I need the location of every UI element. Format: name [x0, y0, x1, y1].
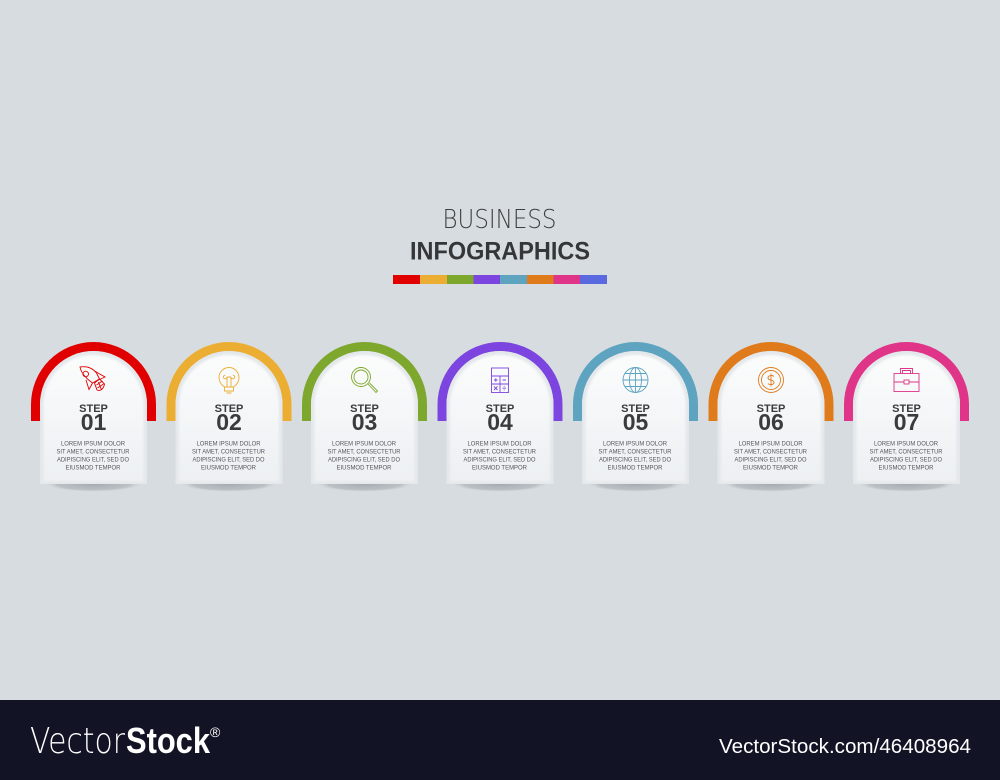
- body text: SIT AMET, CONSECTETUR: [56, 449, 130, 456]
- body text: EIUSMOD TEMPOR: [472, 465, 527, 472]
- card shadow: [858, 476, 956, 492]
- step label: STEP: [350, 403, 379, 415]
- icon: magnifying glass: [352, 368, 378, 392]
- body text: ADIPISCING ELIT, SED DO: [192, 457, 265, 464]
- arch: red: [31, 342, 156, 421]
- body text: ADIPISCING ELIT, SED DO: [870, 457, 942, 464]
- body text: [56, 441, 130, 472]
- body text: [598, 441, 672, 472]
- body text: [734, 441, 807, 472]
- body text: ADIPISCING ELIT, SED DO: [464, 457, 536, 464]
- icon: rocket: [80, 367, 105, 390]
- footer logo: Vector: [30, 721, 125, 762]
- body text: EIUSMOD TEMPOR: [743, 465, 798, 472]
- body text: [870, 441, 943, 472]
- card: [40, 351, 147, 484]
- step 06: [708, 342, 834, 492]
- body text: [328, 441, 401, 472]
- body text: EIUSMOD TEMPOR: [878, 465, 934, 472]
- body text: SIT AMET, CONSECTETUR: [870, 449, 943, 456]
- card: [582, 351, 689, 484]
- step number: 01: [81, 409, 106, 435]
- step 07: [844, 342, 969, 492]
- icon: globe: [623, 368, 648, 392]
- step label: STEP: [757, 403, 785, 415]
- colour bar: [393, 275, 607, 284]
- body text: SIT AMET, CONSECTETUR: [734, 449, 807, 456]
- body text: ADIPISCING ELIT, SED DO: [734, 457, 807, 464]
- body text: LOREM IPSUM DOLOR: [196, 441, 261, 448]
- step 01: [31, 342, 156, 492]
- step 03: [302, 342, 427, 492]
- footer url: VectorStock.com/46408964: [719, 736, 971, 758]
- body text: EIUSMOD TEMPOR: [66, 465, 121, 472]
- icon: dollar coin: [758, 368, 784, 392]
- card: [853, 351, 960, 484]
- icon: light bulb: [219, 368, 239, 393]
- step number: 04: [487, 409, 513, 435]
- card shadow: [586, 476, 684, 492]
- body text: EIUSMOD TEMPOR: [608, 465, 663, 472]
- body text: LOREM IPSUM DOLOR: [332, 441, 397, 448]
- step number: 07: [894, 409, 919, 435]
- step label: STEP: [215, 403, 243, 415]
- step number: 05: [623, 409, 648, 435]
- footer band: [0, 700, 1000, 780]
- step 02: [166, 342, 292, 492]
- body text: SIT AMET, CONSECTETUR: [328, 449, 401, 456]
- step 05: [573, 342, 698, 492]
- body text: SIT AMET, CONSECTETUR: [192, 449, 265, 456]
- card: [176, 351, 282, 484]
- card shadow: [180, 476, 278, 492]
- body text: [463, 441, 536, 472]
- arch: blue: [573, 342, 698, 421]
- body text: ADIPISCING ELIT, SED DO: [599, 457, 671, 464]
- body text: ADIPISCING ELIT, SED DO: [57, 457, 129, 464]
- body text: LOREM IPSUM DOLOR: [61, 441, 126, 448]
- body text: LOREM IPSUM DOLOR: [468, 441, 532, 448]
- body text: SIT AMET, CONSECTETUR: [598, 449, 672, 456]
- card shadow: [722, 476, 820, 492]
- arch: purple: [438, 342, 562, 421]
- title: [410, 205, 590, 266]
- card: [446, 351, 554, 484]
- step number: 03: [352, 409, 377, 435]
- arch: orange: [708, 342, 834, 421]
- body text: EIUSMOD TEMPOR: [336, 465, 392, 472]
- footer logo: [30, 720, 211, 762]
- body text: LOREM IPSUM DOLOR: [874, 441, 939, 448]
- arch: green: [302, 342, 427, 421]
- body text: ADIPISCING ELIT, SED DO: [328, 457, 400, 464]
- arch: pink: [844, 342, 969, 421]
- step label: STEP: [621, 403, 650, 415]
- card shadow: [451, 476, 549, 492]
- icon: briefcase: [894, 368, 919, 392]
- body text: SIT AMET, CONSECTETUR: [463, 449, 536, 456]
- heading: business: BUSINESS: [442, 205, 556, 235]
- heading: infographics: INFOGRAPHICS: [410, 238, 590, 266]
- card: [311, 351, 418, 484]
- step 04: [438, 342, 562, 492]
- footer logo: Stock: [126, 720, 211, 761]
- arch: yellow: [166, 342, 292, 421]
- step label: STEP: [892, 403, 921, 415]
- icon: calculator: [492, 368, 508, 392]
- registered mark: ®: [210, 724, 221, 740]
- body text: LOREM IPSUM DOLOR: [603, 441, 668, 448]
- card shadow: [316, 476, 414, 492]
- body text: EIUSMOD TEMPOR: [201, 465, 256, 472]
- step number: 06: [758, 409, 784, 435]
- step label: STEP: [486, 403, 514, 415]
- body text: [192, 441, 265, 472]
- step number: 02: [216, 409, 242, 435]
- card: [718, 351, 824, 484]
- card shadow: [44, 476, 142, 492]
- body text: LOREM IPSUM DOLOR: [738, 441, 803, 448]
- step label: STEP: [79, 403, 108, 415]
